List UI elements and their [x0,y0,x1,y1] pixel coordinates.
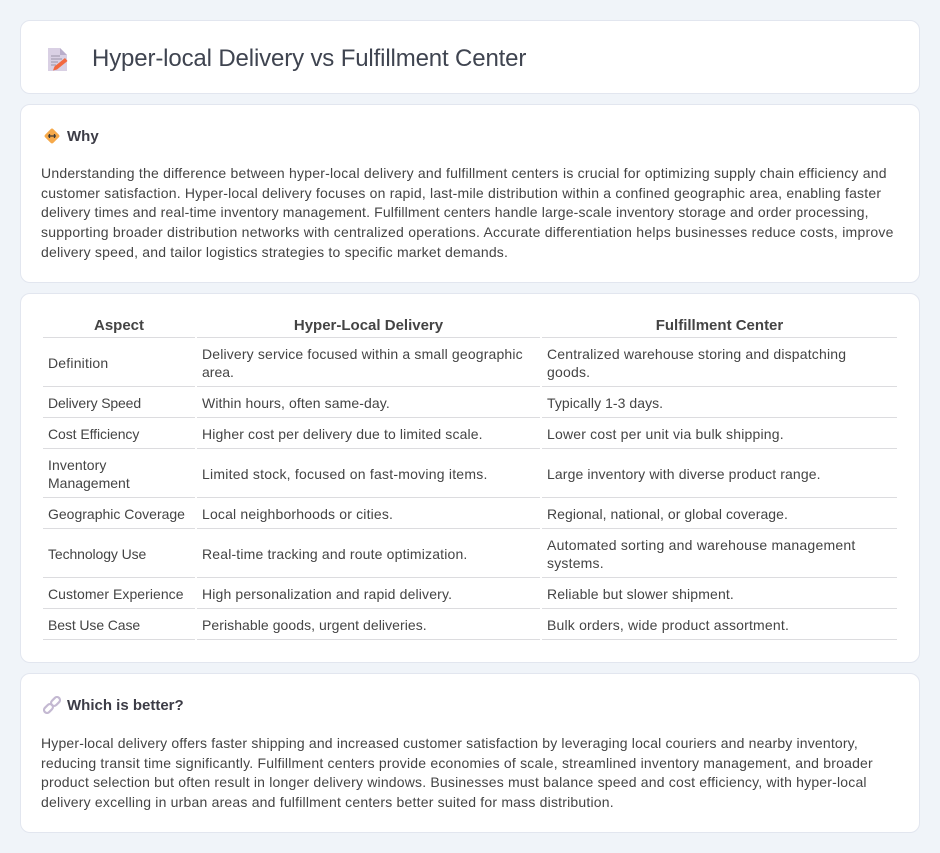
row: cost efficiency [43,426,897,449]
row: geographic coverage: Local neighborhoods or cities. [202,506,393,522]
row: inventory management: Large inventory with diverse product range. [547,466,821,482]
icon: document with pencil [48,48,68,71]
panel: title header [20,20,920,94]
row: delivery speed: Within hours, often same-day. [202,395,390,411]
row: delivery speed [43,395,897,418]
row: customer experience: High personalization and rapid delivery. [202,586,452,602]
row: technology use: systems. [547,555,604,571]
row: definition: goods. [547,364,590,380]
row: best use case [43,617,897,640]
row: technology use: Technology Use [48,546,146,562]
row: customer experience: Customer Experience [48,586,184,602]
text block: verdict: delivery excelling in urban areas and fulfillment centers better suited for mass distribution. [41,794,614,810]
row: cost efficiency: Lower cost per unit via bulk shipping. [547,426,784,442]
row: technology use [43,537,897,578]
row: definition [43,346,897,387]
row: technology use: Real-time tracking and route optimization. [202,546,467,562]
row: inventory management: Management [48,475,130,491]
row: inventory management [43,457,897,498]
table header [43,317,897,338]
row: definition: area. [202,364,234,380]
text block: verdict: product selection but often result in longer delivery windows. Businesses must balance speed and cost efficiency, with hyper-local [41,774,867,790]
row: customer experience [43,586,897,609]
row: inventory management: Limited stock, focused on fast-moving items. [202,466,488,482]
panel: which is better [20,673,920,833]
text block: why explanation: Understanding the difference between hyper-local delivery and fulfillment centers is crucial for optimizing supply chain efficiency and [41,165,887,181]
row: delivery speed: Delivery Speed [48,395,141,411]
row: cost efficiency: Higher cost per delivery due to limited scale. [202,426,483,442]
table header: Fulfillment Center [656,317,783,334]
row: geographic coverage: Geographic Coverage [48,506,185,522]
text block: why explanation: supporting broader distribution networks with centralized operations. Accurate differentiation helps businesses reduce costs, improve [41,224,894,240]
heading: why: Why [67,128,99,145]
text block: verdict: Hyper-local delivery offers faster shipping and increased customer satisfaction by leveraging local couriers and nearby inventory, [41,735,858,751]
row: cost efficiency: Cost Efficiency [48,426,139,442]
row: technology use: Automated sorting and warehouse management [547,537,856,553]
text block: verdict: reducing transit time significantly. Fulfillment centers provide economies of scale, streamlined inventory management, and broader [41,755,873,771]
icon: chain link [43,696,61,714]
text block: why explanation [41,165,894,260]
text block: verdict [41,735,873,810]
row: definition: Delivery service focused within a small geographic [202,346,523,362]
title: Hyper-local Delivery vs Fulfillment Center [92,45,526,72]
icon: warning diamond [44,128,60,144]
row: inventory management: Inventory [48,457,106,473]
panel: comparison table [20,293,920,663]
row: geographic coverage: Regional, national, or global coverage. [547,506,788,522]
row: geographic coverage [43,506,897,529]
row: definition: Definition [48,355,108,371]
text block: why explanation: delivery speed, and tailor logistics strategies to specific market demands. [41,244,508,260]
row: best use case: Best Use Case [48,617,140,633]
row: best use case: Bulk orders, wide product assortment. [547,617,789,633]
text block: why explanation: customer satisfaction. Hyper-local delivery focuses on rapid, last-mile distribution within a confined geographic area, enabling faster [41,185,881,201]
row: delivery speed: Typically 1-3 days. [547,395,663,411]
row: customer experience: Reliable but slower shipment. [547,586,734,602]
table header: Aspect [94,317,144,334]
row: best use case: Perishable goods, urgent deliveries. [202,617,427,633]
text block: why explanation: delivery times and real-time inventory management. Fulfillment centers handle large-scale inventory storage and order processing, [41,204,869,220]
heading: which is better: Which is better? [67,697,184,714]
panel: why [20,104,920,283]
table header: Hyper-Local Delivery [294,317,443,334]
row: definition: Centralized warehouse storing and dispatching [547,346,846,362]
